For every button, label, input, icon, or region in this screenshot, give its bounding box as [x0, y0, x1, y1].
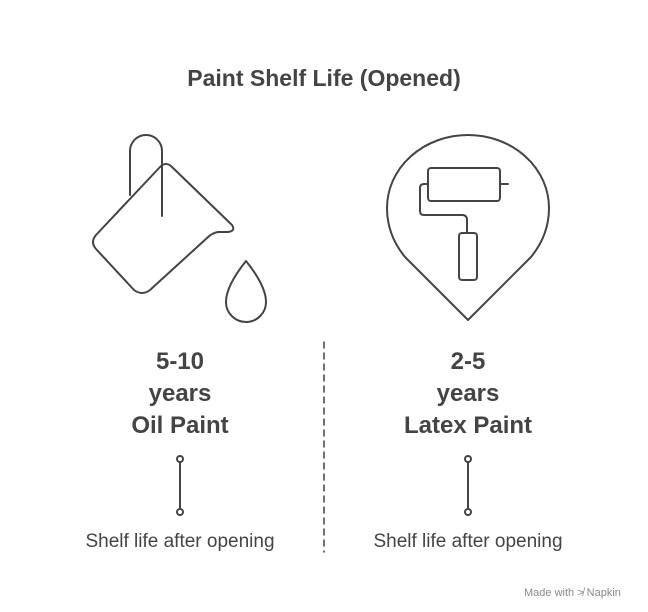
- oil paint label: years: [149, 380, 211, 407]
- latex paint label: 2-5: [451, 348, 485, 375]
- oil paint label: Oil Paint: [131, 412, 229, 439]
- description left: Shelf life after opening: [85, 531, 275, 552]
- icon: paint roller in pin: [387, 135, 549, 320]
- connector right: [465, 456, 471, 515]
- footer: Made with ≯ Napkin: [524, 587, 621, 599]
- latex paint label: Latex Paint: [404, 412, 532, 439]
- connector left: [177, 456, 183, 515]
- oil paint label: 5-10: [156, 348, 204, 375]
- description right: Shelf life after opening: [373, 531, 563, 552]
- latex paint label: [404, 348, 532, 439]
- latex paint label: years: [437, 380, 499, 407]
- oil paint label: [131, 348, 229, 439]
- icon: paint bucket pouring: [93, 135, 266, 322]
- title: Paint Shelf Life (Opened): [187, 65, 461, 91]
